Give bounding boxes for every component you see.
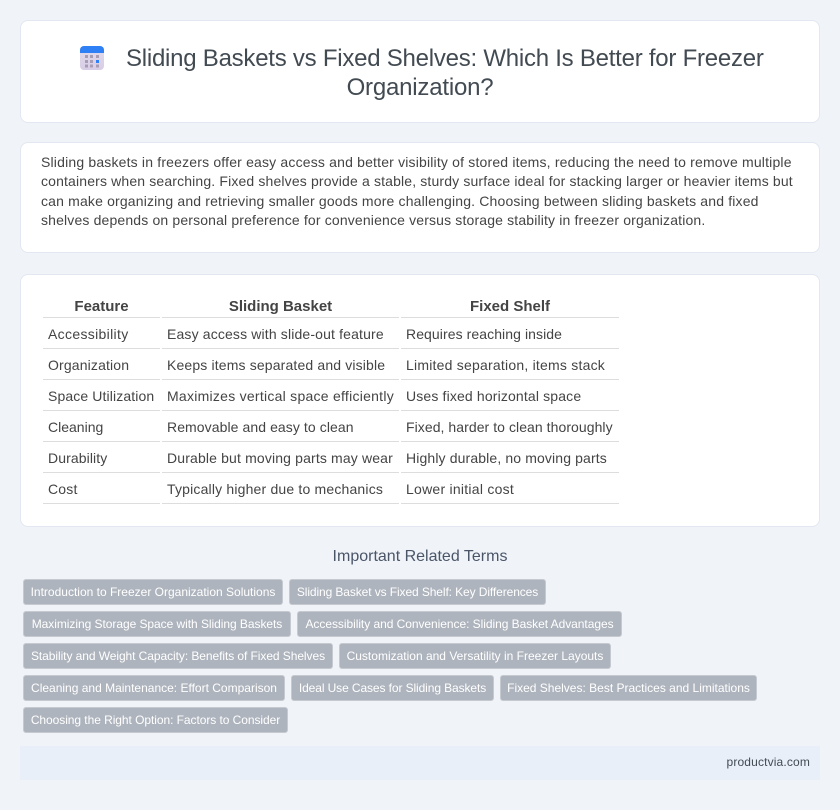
comparison table: Typically higher due to mechanics (167, 481, 383, 497)
comparison table: Lower initial cost (406, 481, 514, 497)
footer bar (20, 746, 820, 780)
table header row: Fixed Shelf (470, 298, 550, 315)
comparison table: Uses fixed horizontal space (406, 388, 581, 404)
related term tags: Introduction to Freezer Organization Solutions (31, 585, 275, 599)
text: can make organizing and retrieving smaller goods more challenging. Choosing between sliding baskets and fixed (41, 193, 759, 209)
related term tags: Fixed Shelves: Best Practices and Limitations (507, 681, 750, 695)
comparison table: Space Utilization (48, 388, 154, 404)
comparison table: Organization (48, 357, 129, 373)
text: containers when searching. Fixed shelves provide a stable, sturdy surface ideal for stacking larger or heavier items but (41, 173, 793, 189)
text: Organization? (347, 74, 493, 101)
panel: comparison table card (20, 274, 820, 527)
heading: page title (126, 45, 764, 101)
related term tags: Stability and Weight Capacity: Benefits of Fixed Shelves (31, 649, 325, 663)
comparison table: Durability (48, 450, 107, 466)
comparison table: Cleaning (48, 419, 103, 435)
panel: introduction text (20, 142, 820, 253)
text: Sliding baskets in freezers offer easy access and better visibility of stored items, reducing the need to remove multiple (41, 154, 792, 170)
table header row (74, 298, 550, 315)
comparison table: Easy access with slide-out feature (167, 326, 384, 342)
comparison table: Keeps items separated and visible (167, 357, 385, 373)
related term tags: Customization and Versatility in Freezer Layouts (347, 649, 603, 663)
icon: calendar (80, 46, 104, 70)
comparison table: Highly durable, no moving parts (406, 450, 607, 466)
related term tags: Choosing the Right Option: Factors to Consider (31, 713, 280, 727)
related term tags: Ideal Use Cases for Sliding Baskets (299, 681, 486, 695)
comparison table: Fixed, harder to clean thoroughly (406, 419, 613, 435)
comparison table: Limited separation, items stack (406, 357, 605, 373)
comparison table: Maximizes vertical space efficiently (167, 388, 394, 404)
comparison table: Requires reaching inside (406, 326, 562, 342)
comparison table: Cost (48, 481, 78, 497)
table header row: Sliding Basket (229, 298, 332, 315)
related term tags: Accessibility and Convenience: Sliding Basket Advantages (305, 617, 614, 631)
table header row: Feature (74, 298, 129, 315)
related term tags: Cleaning and Maintenance: Effort Comparison (31, 681, 277, 695)
footer source: productvia.com (727, 755, 810, 769)
comparison table (43, 298, 619, 504)
text: Sliding Baskets vs Fixed Shelves: Which Is Better for Freezer (126, 45, 764, 72)
related term tags: Sliding Basket vs Fixed Shelf: Key Differences (297, 585, 538, 599)
comparison table: Removable and easy to clean (167, 419, 354, 435)
text block: introduction (41, 154, 793, 228)
comparison table: Accessibility (48, 326, 129, 342)
text: shelves depends on personal preference for convenience versus storage stability in freezer organization. (41, 212, 705, 228)
heading: related terms: Important Related Terms (333, 548, 507, 565)
panel: title header (20, 20, 820, 123)
related term tags (23, 579, 757, 733)
related term tags: Maximizing Storage Space with Sliding Baskets (32, 617, 282, 631)
comparison table: Durable but moving parts may wear (167, 450, 393, 466)
